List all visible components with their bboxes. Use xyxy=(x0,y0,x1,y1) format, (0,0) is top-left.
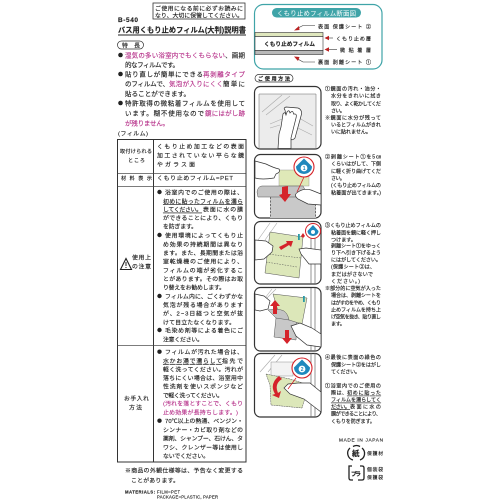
features list: 貼り直しが簡単にできる xyxy=(125,70,203,78)
panel: film cross-section xyxy=(254,4,382,69)
row: material: 材料表示 xyxy=(121,175,152,182)
step 3 text: ③くもり止めフィルムの xyxy=(325,222,381,229)
row: care xyxy=(124,348,243,460)
row: care: フィルムが汚れた場合は、 xyxy=(165,348,243,356)
row: care: で軽く洗ってください。 xyxy=(163,391,223,399)
spec table xyxy=(118,140,246,462)
step 2 text: に軽く折り曲げてくだ xyxy=(331,168,381,175)
layer labels and arrows: 表面 保護シート ② xyxy=(318,24,371,30)
icon: plastic recycling mark: 個装袋 xyxy=(367,466,383,473)
row: care: 方法 xyxy=(129,404,142,412)
icon: plastic recycling mark xyxy=(349,466,383,481)
icon: left hand xyxy=(255,240,273,260)
materials xyxy=(125,490,218,500)
icon: right hand xyxy=(284,383,321,412)
step 3 text: ください。) xyxy=(331,278,360,285)
heading: how to use: ご使用方法 xyxy=(258,76,290,82)
cross-section heading: くもり止めフィルム断面図 xyxy=(277,8,356,18)
step 2 text: ②剥離シート①を5㎝ xyxy=(325,153,381,160)
heading: features: 特 長 xyxy=(122,42,140,50)
step 3 text xyxy=(325,222,381,327)
row: cautions: 気泡が残る場合があります xyxy=(163,301,243,309)
step 2 text: 粘着面が出てきます。) xyxy=(331,190,381,196)
icon: plastic recycling mark: プラ xyxy=(351,471,361,478)
row: care: (汚れを落とすことで、くもり xyxy=(163,400,243,408)
usage note: くもりを防ぎます。 xyxy=(331,418,375,425)
row: care: 軽く洗ってください。汚れが xyxy=(163,365,243,373)
row: care: 水かお湯で濡らして xyxy=(163,357,222,365)
row: care: 落ちにくい場合は、浴室用中 xyxy=(163,374,243,382)
heading: features xyxy=(118,41,144,50)
layer labels and arrows: くもり止め層 xyxy=(336,36,371,42)
step 2 text: さい。 xyxy=(331,175,345,182)
icon: left hand xyxy=(255,161,280,179)
usage note: 初めに貼った xyxy=(347,390,381,397)
step 1 text: いに貼れません。 xyxy=(331,129,371,136)
icon: right hand xyxy=(291,323,321,347)
step 3 text: ます。 xyxy=(331,321,345,327)
row: care: ないでください。 xyxy=(163,453,209,460)
panel: step 2 illustration xyxy=(254,154,321,218)
row: where to attach xyxy=(120,142,244,168)
footnote: ことがあります。 xyxy=(131,476,179,484)
row: where to attach: 加工されていない平らな鏡 xyxy=(157,152,244,160)
row: care: ワシ、クレンザー等は使用し xyxy=(163,444,243,452)
row: cautions xyxy=(120,189,243,343)
step 2 text: (くもり止めフィルムの xyxy=(331,182,381,189)
layer labels and arrows xyxy=(294,24,371,66)
features list xyxy=(118,50,246,128)
features list: が残りません。 xyxy=(125,118,169,128)
features list: 湿気の多い浴室内でもくもらない xyxy=(125,50,225,60)
layer labels and arrows: 裏面 剥離シート ① xyxy=(318,59,371,66)
step 3 text: 剥離シート①をゆっく xyxy=(331,242,381,250)
row: cautions: め効果の持続期間は異なり xyxy=(163,240,243,248)
step 4 text: ④最後に表面の緑色の xyxy=(325,354,381,361)
icon: left hand xyxy=(255,294,270,311)
step 4 text: 保護シート②をはがし xyxy=(331,361,381,368)
materials: FILM=PET xyxy=(157,490,180,494)
icon: callout step 2 drop: 2 xyxy=(301,367,304,373)
film layers diagram: くもり止めフィルム xyxy=(264,40,315,48)
step 3 text: にはがしてください。 xyxy=(331,256,381,264)
step 1 text xyxy=(325,85,381,136)
row: cautions: 使用環境によってくもり止 xyxy=(165,231,243,239)
features list: 特許取得の微粘着フィルムを使用して xyxy=(125,98,245,108)
row: where to attach: 取付けられる xyxy=(120,148,152,155)
row: material: くもり止めフィルム=PET xyxy=(157,174,233,182)
features list: 再剥離タイプ xyxy=(203,70,246,78)
step 1 text: 取り、よく乾かしてくだ xyxy=(331,100,381,107)
row: cautions: 毛染め剤等による着色にご xyxy=(165,326,243,334)
row: care: 指先で xyxy=(222,357,243,365)
row: cautions: が、2~3日経つと空気が抜 xyxy=(163,310,243,318)
usage note: 際は、 xyxy=(331,390,347,397)
row: cautions: とがあります。その際はお取 xyxy=(163,275,243,283)
row: cautions: を防ぎます。 xyxy=(163,223,197,231)
product code: B-540 xyxy=(118,17,138,24)
features list: 簡単に xyxy=(223,79,245,88)
step 1 text: ①鏡面の汚れ・油分・ xyxy=(325,85,381,92)
row: cautions: の注意 xyxy=(132,262,151,270)
step 3 text: はがすのをやめ、くもり xyxy=(331,299,381,306)
row: cautions: してください。 xyxy=(163,207,202,214)
icon: callout step 1 drop: 1 xyxy=(303,166,306,172)
icon: warning triangle xyxy=(120,258,132,270)
features list: 気泡が入りにくく xyxy=(169,79,223,88)
materials: PACKAGE=PLASTIC, PAPER xyxy=(157,494,218,500)
materials: MATERIALS: xyxy=(125,490,156,494)
icon: paper recycling mark: 紙 xyxy=(352,448,360,458)
step 4 text xyxy=(325,354,381,375)
step 2 text: くらいはがして、下側 xyxy=(331,160,381,168)
step 3 text: ※部分的に空気が入った xyxy=(325,285,381,292)
features list: 鏡にはがし跡 xyxy=(205,108,246,118)
icon: hand wiping with cloth xyxy=(278,107,302,148)
row: where to attach: ところ xyxy=(128,158,145,164)
usage note: 表面に水の xyxy=(350,403,381,410)
title: バス用くもり止めフィルム(大判)説明書 xyxy=(118,26,246,34)
step 1 text: さい。 xyxy=(331,107,345,114)
step 1 text: 水分をきれいに拭き xyxy=(331,93,381,100)
icon: red arrow down xyxy=(279,186,291,202)
row: cautions: 注意ください。 xyxy=(163,335,203,343)
row: care: 止め効果が長持ちします。) xyxy=(163,408,238,416)
row: cautions: フィルムの端が劣化するこ xyxy=(163,266,243,274)
row: care: お手入れ xyxy=(124,394,149,402)
step 1 text: ※鏡面に水分が残って xyxy=(325,114,381,121)
panel: step 4 illustration xyxy=(254,353,321,417)
footnote: ※商品の外観仕様等は、予告なく変更する xyxy=(125,466,243,474)
notice box: ご使用になる前に必ずお読みに xyxy=(155,4,243,12)
usage note: ①浴室内でのご使用の xyxy=(325,382,381,389)
row: cautions: フィルム内に、ごくわずかな xyxy=(165,292,243,300)
heading: how to use xyxy=(255,74,293,82)
panel: step 1 illustration xyxy=(254,86,321,149)
step 3 text: まだはがさないで xyxy=(331,271,373,278)
row: care: 70℃以上の熱湯、ベンジン・ xyxy=(165,417,243,425)
features list: 貼ることができます。 xyxy=(125,89,190,98)
row: cautions: 初めに貼ったフィルムを濡ら xyxy=(163,197,243,205)
row: cautions: 表面に水の膜 xyxy=(203,206,243,214)
notice box xyxy=(153,3,245,20)
usage note: フィルムを濡らしてく xyxy=(331,397,381,404)
icon: paper recycling mark: 保護材 xyxy=(367,450,383,457)
features list: のフィルムで、 xyxy=(125,80,169,88)
icon: red arrow curved xyxy=(272,376,282,398)
row: cautions: り替えをお勧めします。 xyxy=(163,284,225,292)
row: care: 薬剤、シャンプー、石けん、タ xyxy=(163,435,243,443)
icon: right hand xyxy=(296,189,321,205)
step 3 text: 場合は、剥離シートを xyxy=(331,292,381,299)
row: care: シンナー・カビ取り剤などの xyxy=(163,426,243,434)
notice box: なり、大切に保管してください。 xyxy=(155,12,243,20)
row: cautions: 室乾燥機のご使用により、 xyxy=(163,258,243,266)
label: film: (フィルム) xyxy=(118,130,148,138)
icon: right hand xyxy=(299,248,321,264)
footnote xyxy=(125,466,243,484)
features list: います。糊不使用なので xyxy=(125,108,204,118)
step 3 text: り下へ引き下げるよう xyxy=(331,250,381,257)
step 3 text: げ空気を抜き、貼り直し xyxy=(331,313,381,320)
row: cautions: ます。また、長期間または浴 xyxy=(163,249,243,257)
panel: step 3 illustration xyxy=(254,222,321,284)
icon: callout step 2 drop xyxy=(306,224,320,238)
row: cautions: 使用上 xyxy=(132,254,151,262)
row: where to attach: くもり止め加工などの表面 xyxy=(157,142,244,150)
icon: paper recycling mark xyxy=(348,446,383,460)
step 3 text: 止めフィルムを持ち上 xyxy=(331,306,381,313)
row: cautions: 浴室内でのご使用の際は、 xyxy=(165,189,243,197)
row: material xyxy=(121,174,233,182)
row: where to attach: やガラス面 xyxy=(157,160,195,168)
step 4 text: てください。 xyxy=(331,368,360,375)
step 3 text: (保護シート②は、 xyxy=(331,264,375,271)
step 3 text: つけます。 xyxy=(331,238,356,244)
layer labels and arrows: 微粘着層 xyxy=(340,47,371,54)
icon: red arrow xyxy=(279,241,293,250)
icon: red arrows xyxy=(270,300,292,344)
usage note xyxy=(325,382,381,425)
row: cautions: けて目立たなくなります。 xyxy=(163,318,235,326)
step 1 text: いるとフィルムがきれ xyxy=(331,121,381,128)
panel: step 3 air-removal illustration xyxy=(254,288,321,351)
step 3 text: 粘着面を鏡に軽く押し xyxy=(331,229,381,236)
step 2 text xyxy=(325,153,381,196)
features list: 的なフィルムです。 xyxy=(125,60,179,69)
row: cautions: ができることにより、くもり xyxy=(163,214,243,222)
features list: 、画期 xyxy=(225,52,246,60)
made in japan: MADE IN JAPAN xyxy=(339,437,383,442)
row: care: 性洗剤を使いスポンジなど xyxy=(163,382,243,390)
usage note: 膜ができることにより、 xyxy=(331,411,381,418)
usage note: ださい。 xyxy=(331,403,350,410)
icon: plastic recycling mark: 保護袋 xyxy=(367,474,383,481)
